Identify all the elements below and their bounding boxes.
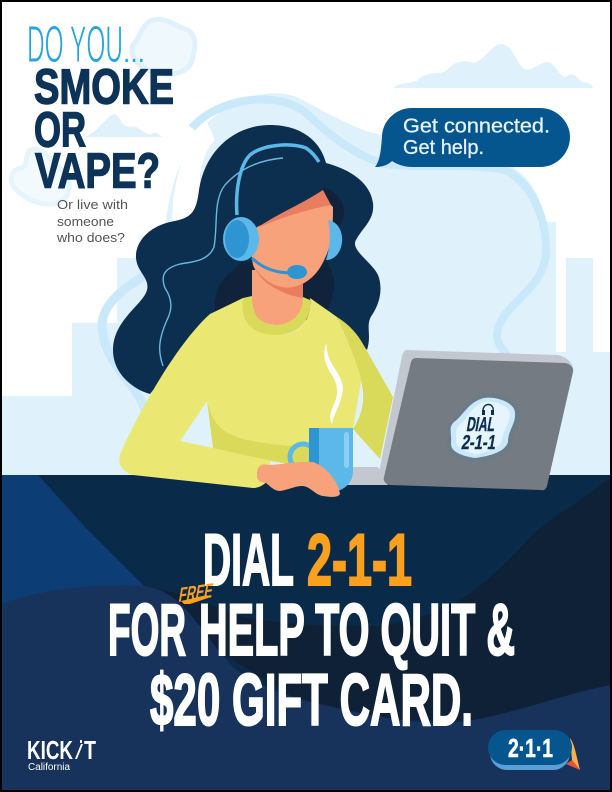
sweater collar xyxy=(242,296,310,335)
background: lower left smoke puff xyxy=(11,149,69,204)
mug handle xyxy=(290,444,316,470)
background: large smoke swirl xyxy=(102,93,548,440)
title: do you xyxy=(27,16,145,74)
laptop sticker: 2-1-1 xyxy=(460,432,498,454)
free scribble xyxy=(177,579,215,607)
hairline shade xyxy=(257,190,331,228)
background: city skyline xyxy=(0,222,612,480)
headline: 2-1-1 xyxy=(307,520,412,601)
headline xyxy=(108,520,515,741)
subtitle xyxy=(56,197,128,245)
background: top right cloud xyxy=(394,44,593,88)
coffee mug xyxy=(290,343,353,491)
laptop xyxy=(345,350,573,490)
microphone xyxy=(252,258,292,273)
title: smoke or vape: SMOKE xyxy=(34,60,174,114)
2-1-1 logo xyxy=(488,730,580,770)
subtitle: who does? xyxy=(56,230,125,245)
hair xyxy=(113,125,380,394)
2-1-1 logo: 2·1·1 xyxy=(508,733,553,763)
kick it california logo: California xyxy=(28,762,70,773)
body shade xyxy=(207,401,320,470)
neck xyxy=(252,270,303,325)
woman illustration xyxy=(113,125,393,488)
desk surface xyxy=(0,475,612,792)
laptop sticker xyxy=(447,394,520,462)
laptop sticker: DIAL xyxy=(465,414,497,436)
steam xyxy=(324,343,343,424)
headline: FOR xyxy=(108,590,186,671)
subtitle: Or live with xyxy=(57,197,128,212)
kick it california logo: KICK xyxy=(27,735,73,765)
left ear cup xyxy=(223,217,259,261)
speech bubble: Get connected. xyxy=(403,114,550,138)
kick it california logo: T xyxy=(84,735,96,765)
hair shadow behind neck xyxy=(215,262,334,315)
headset cord xyxy=(160,158,283,366)
background: left cloud xyxy=(85,114,162,137)
right ear cup xyxy=(326,220,342,260)
title: smoke or vape: VAPE? xyxy=(35,144,160,198)
headline: DIAL xyxy=(203,520,294,601)
sticker headset icon xyxy=(482,404,494,415)
speech bubble xyxy=(375,108,570,167)
title: do you: ... xyxy=(123,36,145,69)
hand xyxy=(257,462,340,497)
sweater xyxy=(119,298,362,488)
chin shadow xyxy=(255,268,303,298)
headset band xyxy=(237,145,319,215)
background: upper left smoke puff xyxy=(132,19,195,74)
arm gap xyxy=(180,401,213,448)
title: do you: DO YOU xyxy=(27,16,123,74)
speech bubble: Get help. xyxy=(403,136,484,159)
right sleeve shade xyxy=(337,317,393,459)
laptop lid xyxy=(378,350,573,484)
title: smoke or vape: OR xyxy=(34,104,86,158)
face xyxy=(252,197,333,289)
title: smoke or vape xyxy=(34,60,174,198)
subtitle: someone xyxy=(57,214,114,229)
free scribble: FREE xyxy=(177,579,215,607)
laptop base xyxy=(345,467,388,485)
